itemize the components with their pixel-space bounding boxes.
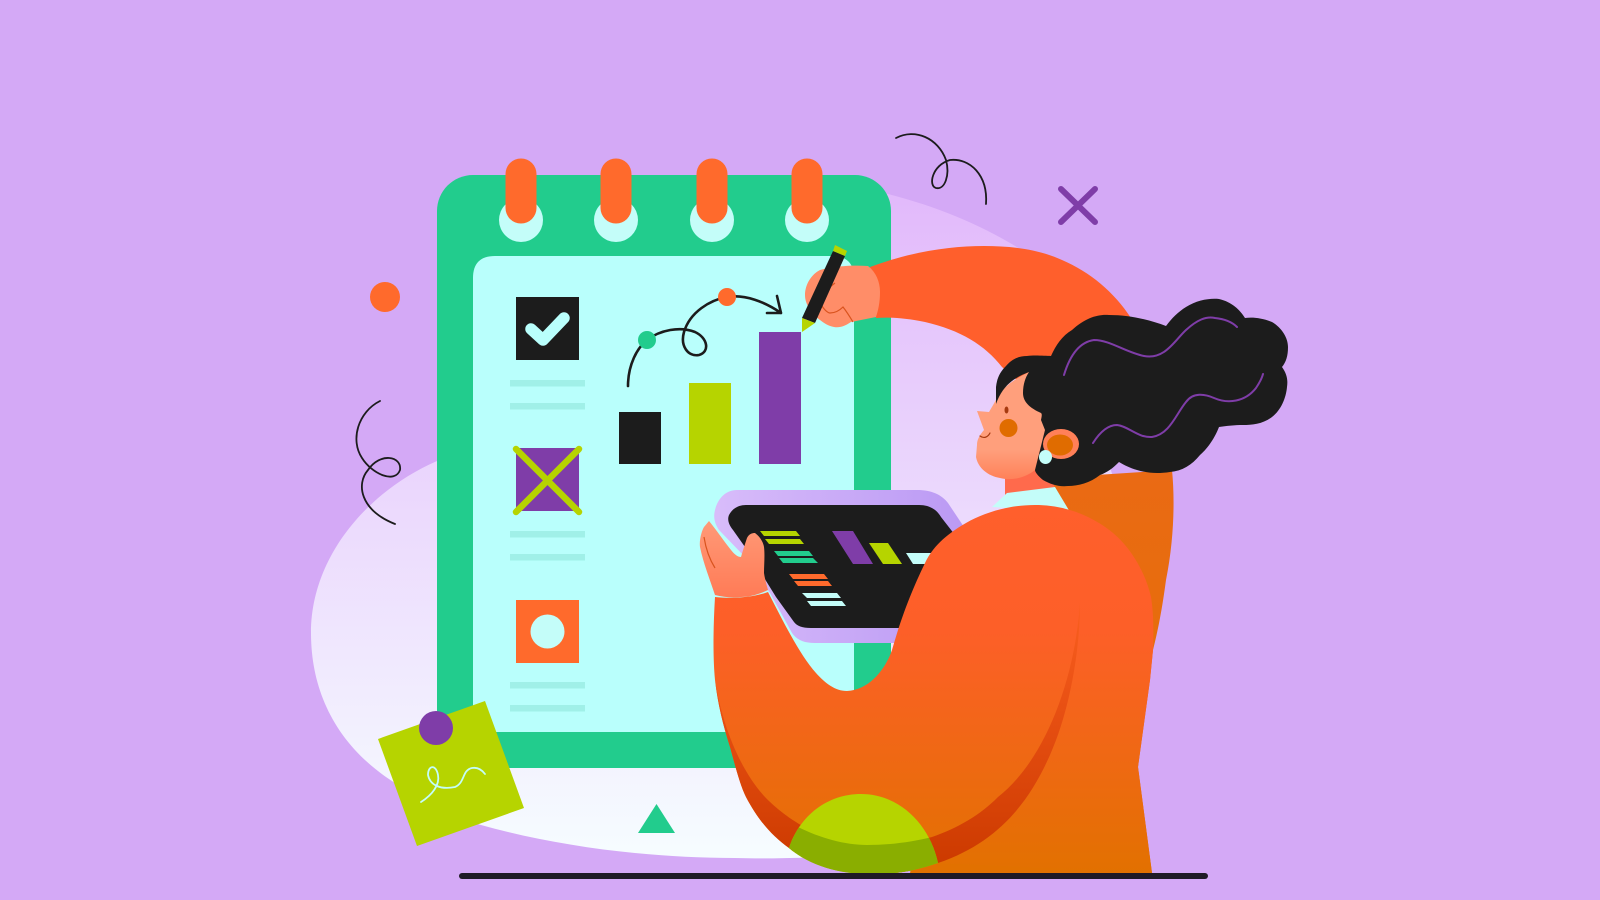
hair strand 2 xyxy=(1093,374,1263,443)
calendar sheet xyxy=(473,256,854,732)
tablet list bars xyxy=(760,531,846,606)
hair back / torso back xyxy=(910,470,1174,873)
calendar frame xyxy=(437,175,891,768)
belly patch xyxy=(789,794,938,873)
icon: purple cross xyxy=(1061,189,1095,222)
ear xyxy=(1043,429,1079,459)
sleeve crescent shadow xyxy=(715,602,1080,874)
text lines 1 xyxy=(510,380,585,410)
checklist item: circle xyxy=(516,600,579,663)
sticky note xyxy=(378,701,524,846)
decorative squiggle: left xyxy=(356,401,400,524)
collar xyxy=(992,487,1070,512)
face xyxy=(976,372,1050,479)
note pin xyxy=(419,711,453,745)
icon: orange dot xyxy=(370,282,400,312)
raised arm xyxy=(870,246,1131,400)
growth arrow curve xyxy=(628,288,781,386)
checklist item: cross xyxy=(516,448,579,512)
calendar board xyxy=(437,158,891,768)
belly patch shadow xyxy=(789,828,938,873)
earring xyxy=(1039,450,1052,464)
bar chart xyxy=(619,332,801,464)
mouth xyxy=(980,433,990,437)
calendar rings xyxy=(499,158,829,242)
ground line xyxy=(459,873,1208,879)
illustration xyxy=(311,133,1288,879)
tablet xyxy=(714,490,966,643)
background blob xyxy=(311,177,1120,858)
tablet chart bars xyxy=(832,531,935,564)
sweater body and left arm xyxy=(714,505,1153,874)
raised hand xyxy=(805,266,880,327)
triangle marker xyxy=(638,804,675,833)
left hand finger line xyxy=(704,537,715,568)
text lines 2 xyxy=(510,531,585,560)
neck xyxy=(1005,465,1055,495)
cheek xyxy=(1000,419,1018,437)
text lines 3 xyxy=(510,682,585,712)
eye xyxy=(1004,406,1008,414)
left hand xyxy=(700,521,768,597)
note scribble xyxy=(421,767,485,802)
pen xyxy=(802,245,847,332)
person xyxy=(700,245,1288,880)
hair strand 1 xyxy=(1064,318,1237,375)
decorative squiggle: top right xyxy=(896,134,986,204)
hair xyxy=(996,299,1288,486)
checklist item: check xyxy=(516,297,579,360)
